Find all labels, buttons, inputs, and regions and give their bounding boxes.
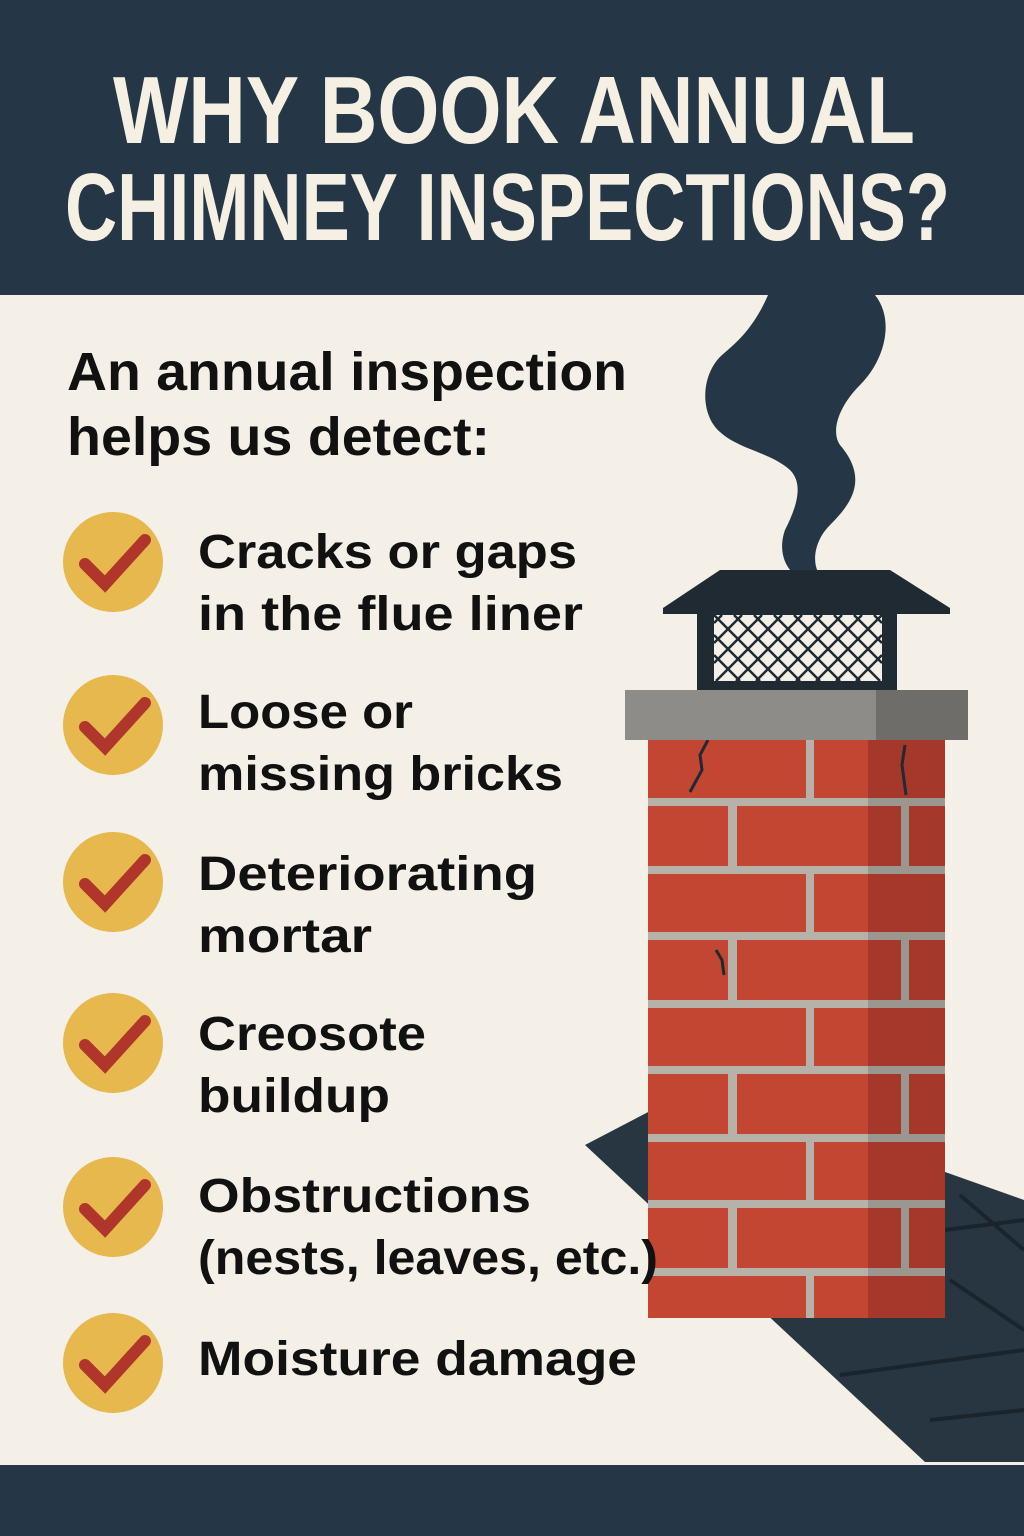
item 1: in the flue liner <box>198 588 583 641</box>
roof <box>585 1085 1024 1462</box>
item 2: missing bricks <box>198 748 563 801</box>
footer band <box>0 1465 1024 1536</box>
intro text: An annual inspection <box>67 342 627 402</box>
item 4 <box>63 993 426 1123</box>
item 3 <box>63 832 537 963</box>
item 2 <box>63 675 563 801</box>
cracks <box>690 740 906 975</box>
item 5: (nests, leaves, etc.) <box>198 1232 658 1285</box>
item 4: buildup <box>198 1070 390 1123</box>
item 3: mortar <box>198 910 372 963</box>
item 6: Moisture damage <box>198 1333 637 1386</box>
header band <box>0 0 1024 295</box>
item 3: Deteriorating <box>198 848 537 901</box>
item 1 <box>63 512 583 641</box>
intro text: helps us detect: <box>67 407 490 467</box>
spark arrestor <box>697 606 897 690</box>
item 4: Creosote <box>198 1008 426 1061</box>
item 1: Cracks or gaps <box>198 526 577 579</box>
item 2: Loose or <box>198 686 413 739</box>
smoke <box>705 295 886 572</box>
cap slab <box>625 690 880 740</box>
title <box>65 57 950 261</box>
item 5: Obstructions <box>198 1170 531 1223</box>
item 5 <box>63 1157 658 1285</box>
checklist <box>63 512 658 1413</box>
intro text <box>67 342 627 467</box>
item 6 <box>63 1313 637 1413</box>
chimney <box>625 570 968 1318</box>
